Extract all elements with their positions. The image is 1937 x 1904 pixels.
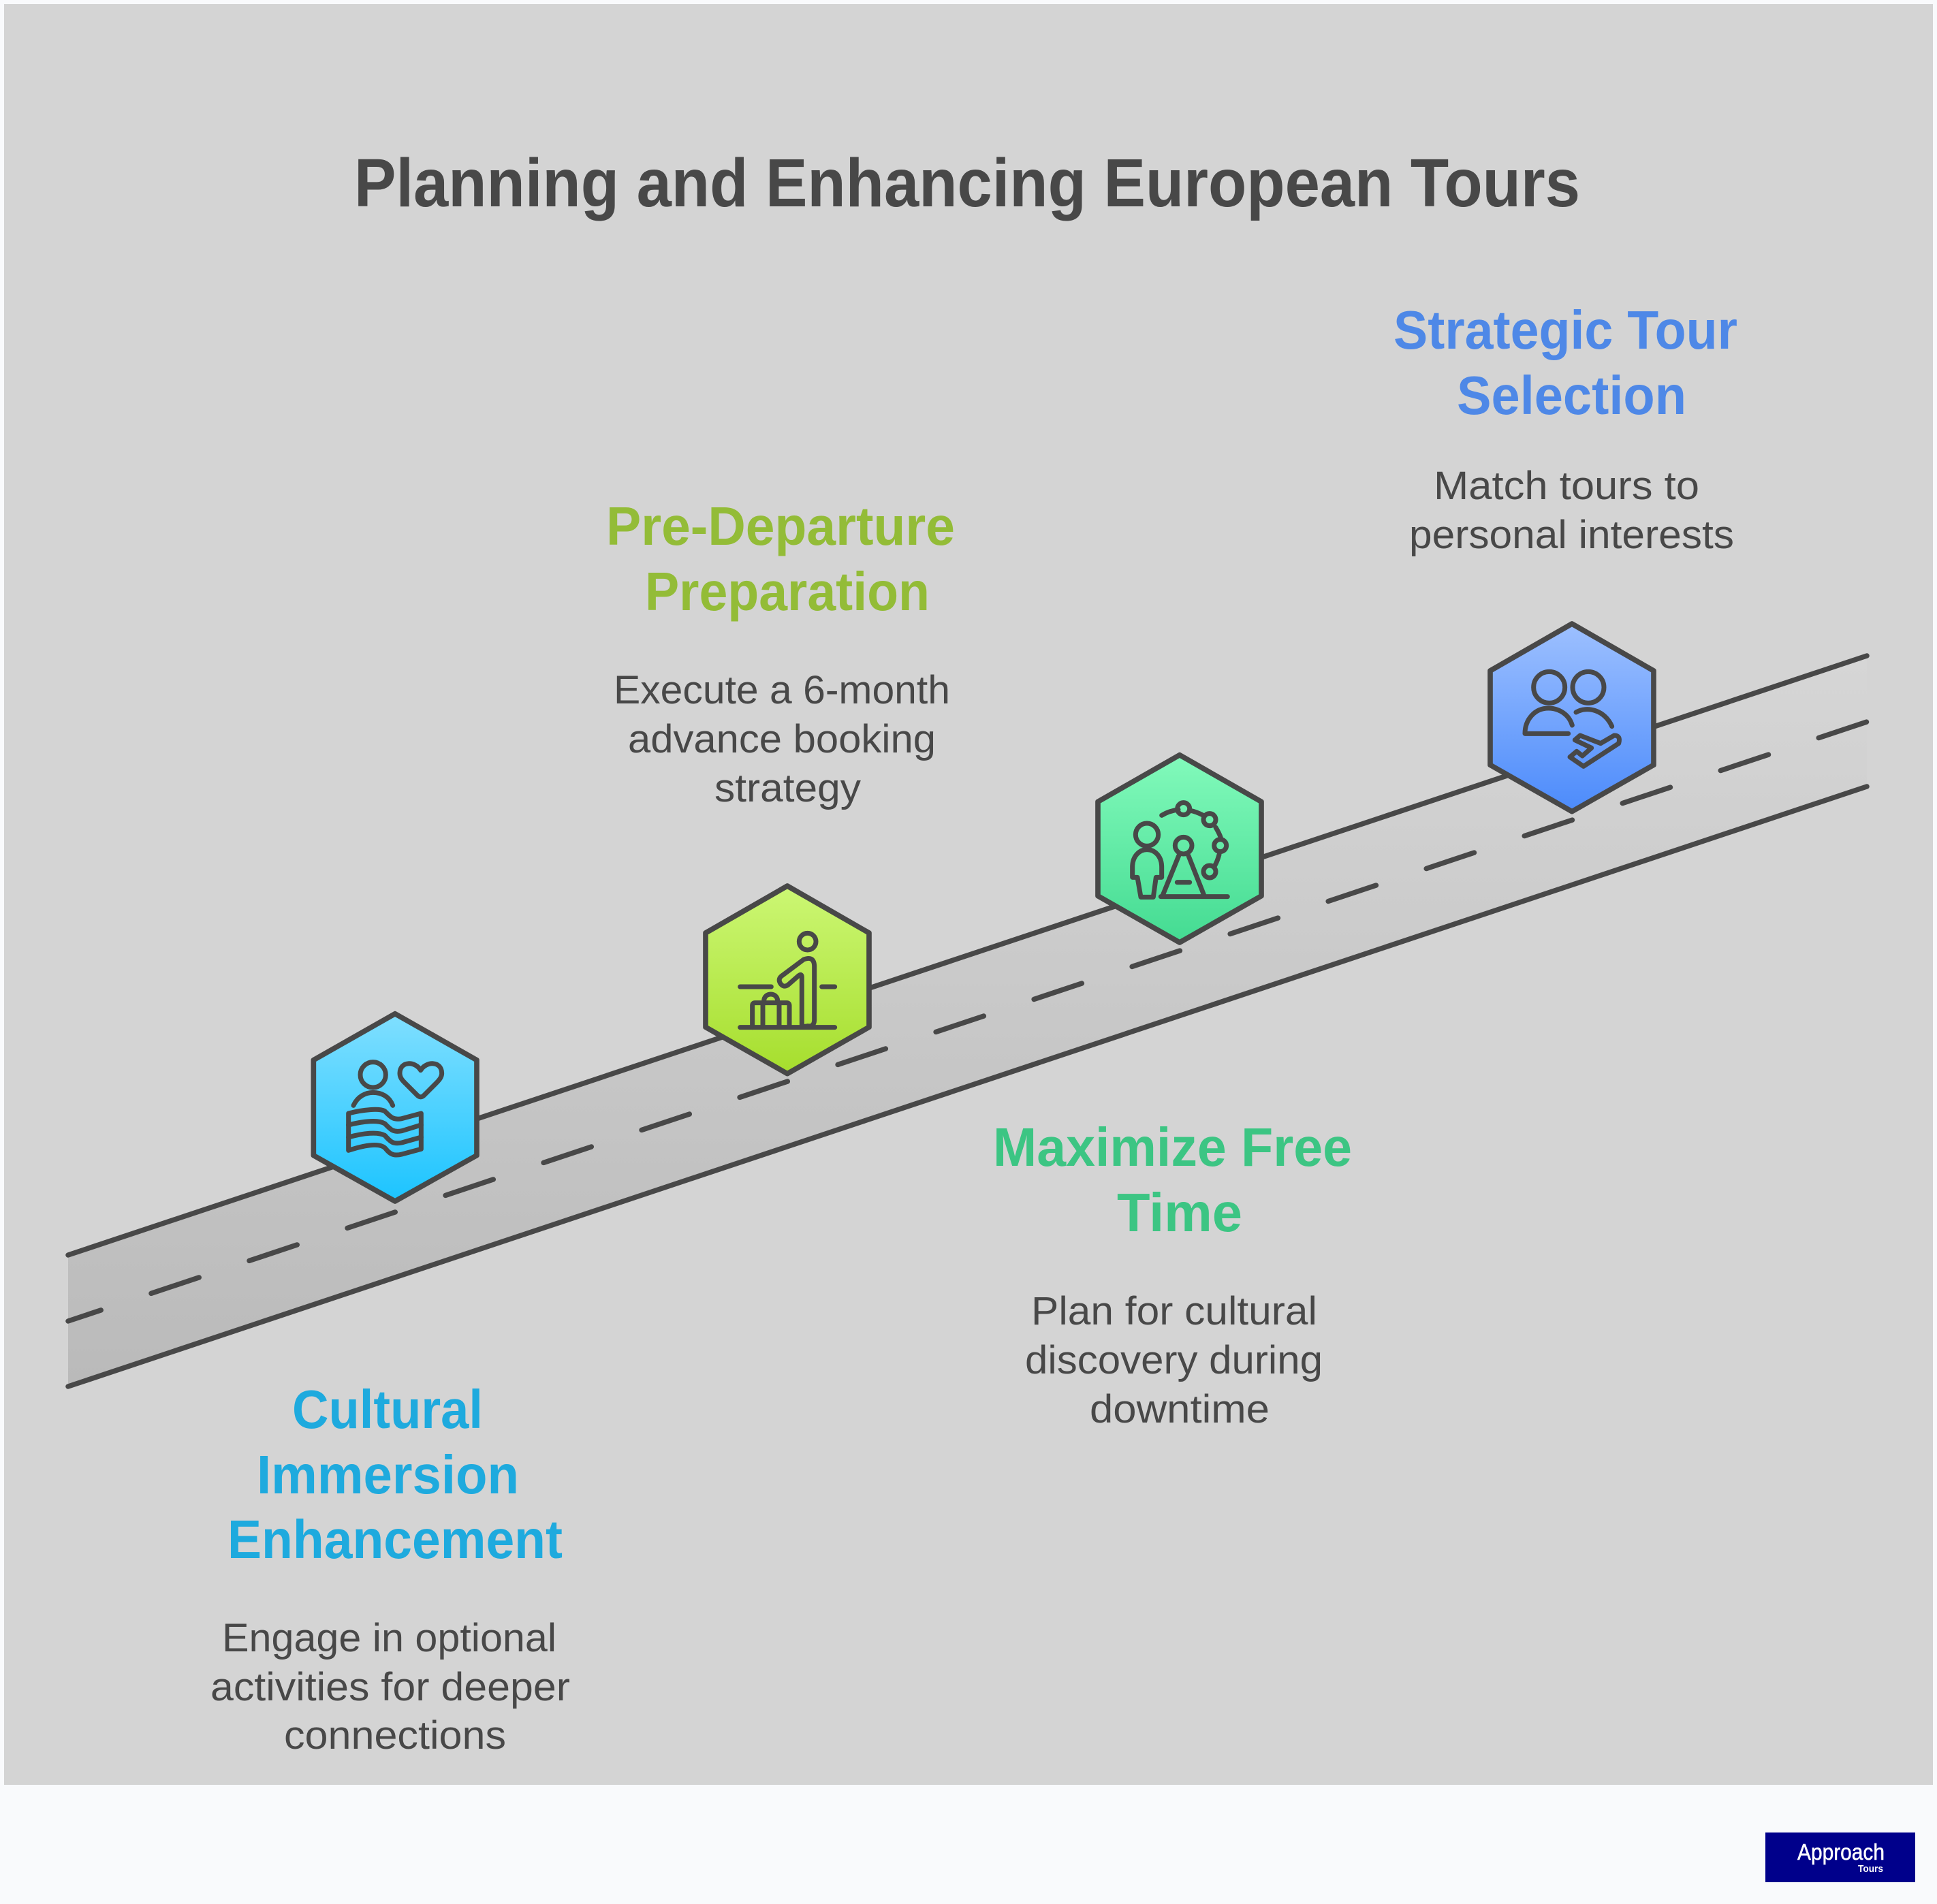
description: Plan for cultural bbox=[1031, 1289, 1317, 1333]
text block: strategic tour selection bbox=[1393, 300, 1737, 557]
logo: Approach Tours: Tours bbox=[1858, 1863, 1883, 1875]
description: downtime bbox=[1090, 1387, 1270, 1431]
heading: Enhancement bbox=[227, 1509, 563, 1570]
icon: hexagon 4 tour selection bbox=[1490, 624, 1654, 812]
text block: cultural immersion enhancement bbox=[210, 1379, 570, 1758]
description: personal interests bbox=[1409, 513, 1734, 557]
description: discovery during bbox=[1025, 1338, 1323, 1382]
description: activities for deeper bbox=[210, 1665, 570, 1709]
heading: Immersion bbox=[257, 1444, 519, 1505]
heading: Strategic Tour bbox=[1393, 300, 1737, 360]
description: Engage in optional bbox=[222, 1616, 556, 1660]
icon: hexagon 3 free time bbox=[1098, 755, 1261, 942]
heading: Cultural bbox=[292, 1379, 483, 1440]
description: strategy bbox=[714, 766, 861, 810]
text block: pre-departure preparation bbox=[606, 496, 955, 810]
logo: Approach Tours bbox=[1765, 1832, 1915, 1882]
icon: hexagon 1 cultural immersion bbox=[313, 1014, 477, 1201]
text block: maximize free time bbox=[993, 1117, 1352, 1431]
title: Planning and Enhancing European Tours bbox=[354, 145, 1580, 221]
description: Match tours to bbox=[1434, 464, 1699, 508]
heading: Preparation bbox=[645, 561, 930, 622]
description: advance booking bbox=[628, 717, 936, 761]
heading: Selection bbox=[1457, 365, 1686, 426]
heading: Maximize Free bbox=[993, 1117, 1352, 1177]
description: connections bbox=[284, 1713, 506, 1758]
icon: hexagon 2 pre-departure bbox=[706, 886, 869, 1074]
heading: Time bbox=[1117, 1182, 1242, 1243]
road bbox=[68, 656, 1867, 1386]
logo: Approach Tours: Approach bbox=[1797, 1839, 1885, 1865]
heading: Pre-Departure bbox=[606, 496, 955, 556]
description: Execute a 6-month bbox=[614, 668, 950, 712]
